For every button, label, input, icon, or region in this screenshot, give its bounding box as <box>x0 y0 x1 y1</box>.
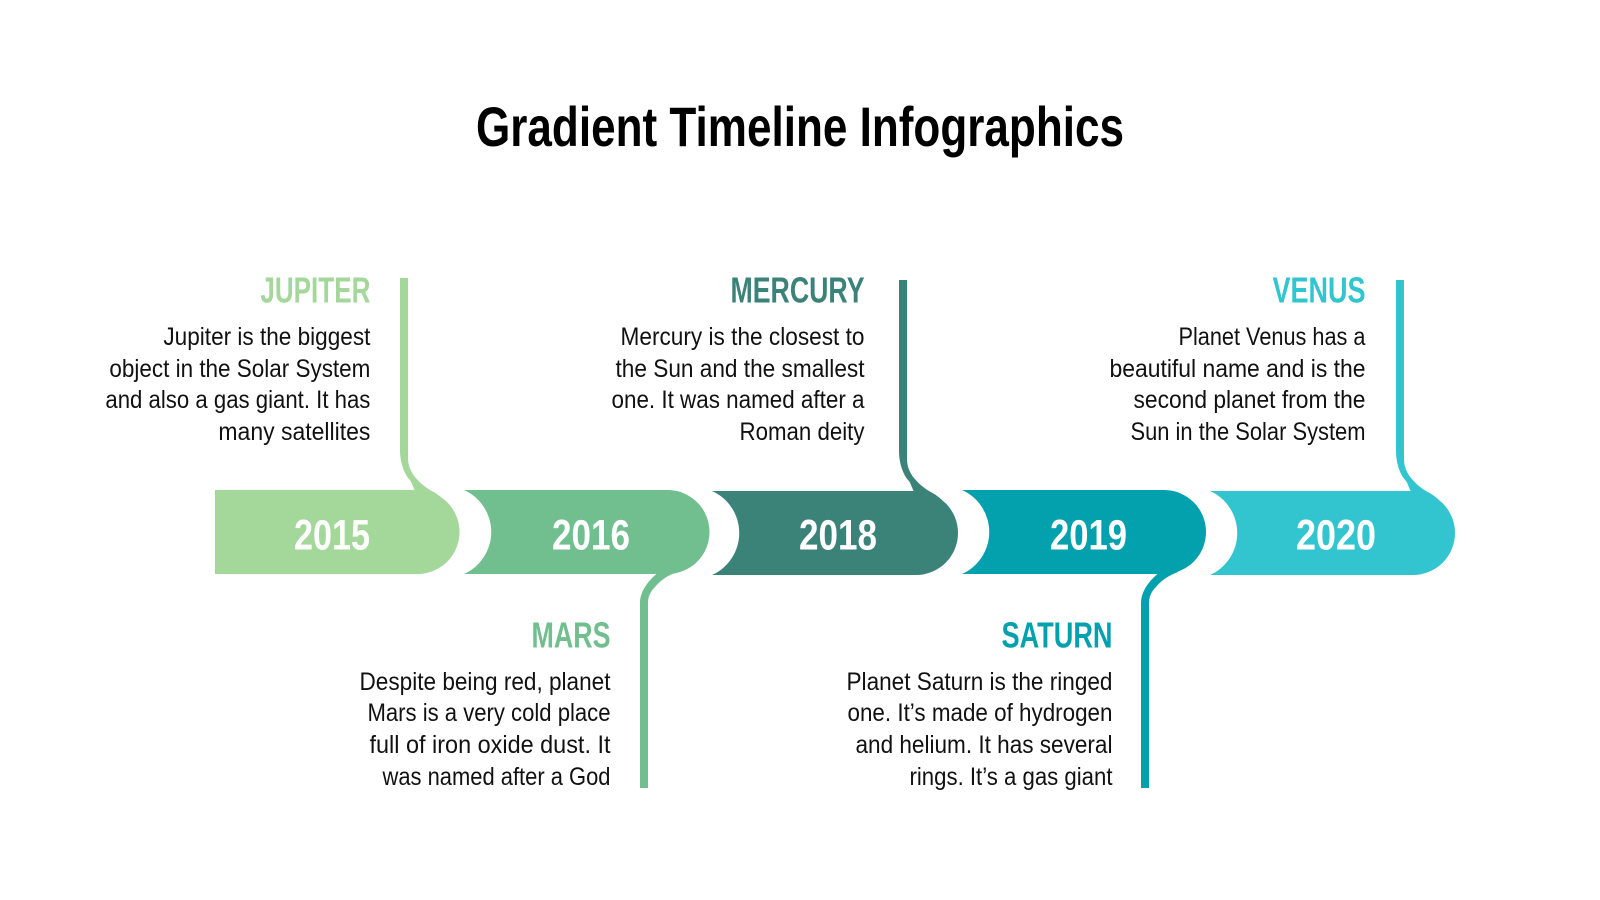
text block: Jupiter: many satellites <box>218 418 370 446</box>
timeline segment: 2019 <box>962 490 1206 574</box>
year: 2016: 2016 <box>552 512 630 560</box>
text block: Venus: Sun in the Solar System <box>1130 418 1366 446</box>
year: 2020: 2020 <box>1296 512 1376 560</box>
title: Gradient Timeline Infographics <box>476 95 1124 158</box>
panel: 2020 Venus <box>1110 270 1455 575</box>
text block: Mars: was named after a God <box>382 763 610 791</box>
heading: Mars: MARS <box>532 614 610 656</box>
text block: Mercury: Mercury is the closest to <box>620 323 864 351</box>
text block: Mercury: Roman deity <box>740 418 865 446</box>
year: 2018: 2018 <box>799 512 877 560</box>
panel: 2019 Saturn <box>846 490 1206 791</box>
text block: Saturn: rings. It’s a gas giant <box>910 763 1113 791</box>
timeline segment: 2015 <box>215 490 460 574</box>
panel: 2018 Mercury <box>612 270 958 575</box>
text block: Mars: Mars is a very cold place <box>368 699 610 727</box>
text block: Saturn: and helium. It has several <box>856 731 1112 759</box>
text block: Saturn <box>846 668 1113 791</box>
timeline segment: 2020 <box>1210 491 1455 575</box>
connector stem: Mars <box>640 560 677 788</box>
text block: Mars <box>360 668 611 791</box>
text block: Jupiter <box>105 323 370 446</box>
timeline segment: 2018 <box>712 491 958 575</box>
text block: Venus: second planet from the <box>1134 386 1366 414</box>
heading: Mercury: MERCURY <box>730 270 864 310</box>
text block: Venus <box>1110 323 1366 446</box>
connector stem: Mercury <box>899 280 942 506</box>
text block: Mars: full of iron oxide dust. It <box>370 731 611 759</box>
text block: Saturn: Planet Saturn is the ringed <box>846 668 1112 696</box>
text block: Jupiter: object in the Solar System <box>109 355 370 383</box>
connector stem: Venus <box>1396 280 1439 506</box>
text block: Mars: Despite being red, planet <box>360 668 611 696</box>
text block: Saturn: one. It’s made of hydrogen <box>848 699 1112 727</box>
panel: 2016 Mars <box>360 490 710 791</box>
text block: Mercury: one. It was named after a <box>612 386 865 414</box>
text block: Venus: Planet Venus has a <box>1178 323 1366 351</box>
year: 2019: 2019 <box>1050 512 1127 560</box>
connector stem: Saturn <box>1141 560 1178 788</box>
heading: Jupiter: JUPITER <box>260 270 370 310</box>
text block: Jupiter: and also a gas giant. It has <box>105 386 370 414</box>
text block: Venus: beautiful name and is the <box>1110 355 1366 383</box>
year: 2015: 2015 <box>294 512 370 560</box>
text block: Mercury <box>612 323 865 446</box>
timeline segment: 2016 <box>464 490 710 574</box>
text block: Mercury: the Sun and the smallest <box>616 355 865 383</box>
heading: Venus: VENUS <box>1272 270 1366 310</box>
text block: Jupiter: Jupiter is the biggest <box>163 323 370 351</box>
panel: 2015 Jupiter <box>105 270 460 574</box>
connector stem: Jupiter <box>400 278 443 505</box>
heading: Saturn: SATURN <box>1002 614 1112 656</box>
